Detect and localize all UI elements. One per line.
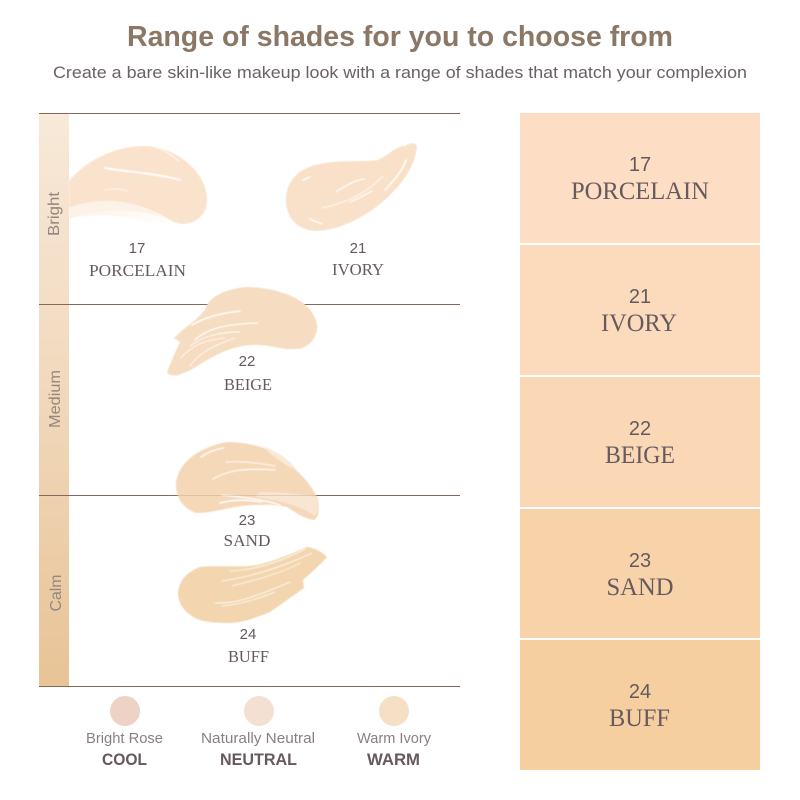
label: bright: Bright [46, 191, 63, 236]
shade smear: 17 porcelain [69, 146, 207, 224]
shade smear: 24 buff [178, 547, 327, 623]
legend: cool: Bright Rose [86, 730, 163, 747]
swatch: 17 porcelain [520, 113, 760, 243]
label: 17 porcelain: 17 [129, 240, 145, 257]
label: 21 ivory [332, 240, 384, 279]
label: medium: Medium [47, 370, 64, 428]
chart grid lines [39, 114, 460, 686]
swatch: 17 porcelain: 17 [629, 154, 651, 176]
legend: warm: Warm Ivory [357, 730, 431, 747]
shade smear: 22 beige [167, 287, 317, 376]
swatch: 24 buff [520, 640, 760, 770]
shade smear: 23 sand [176, 442, 319, 520]
label: 23 sand: SAND [224, 531, 270, 550]
legend: cool [86, 696, 163, 769]
shade smear: 21 ivory [286, 143, 417, 231]
brightness scale bar [39, 113, 69, 686]
legend: neutral [201, 696, 315, 769]
legend: cool: COOL [102, 750, 147, 769]
swatch: 23 sand: 23 [629, 550, 651, 572]
label: 23 sand: 23 [239, 512, 255, 529]
legend: neutral: Naturally Neutral [201, 730, 315, 747]
label: 22 beige [224, 353, 272, 394]
label: 22 beige: BEIGE [224, 375, 272, 394]
label: 24 buff: BUFF [228, 647, 269, 666]
label: 17 porcelain [89, 240, 186, 280]
label: 24 buff: 24 [240, 626, 256, 643]
legend: neutral: NEUTRAL [220, 750, 297, 769]
swatch: 22 beige: 22 [629, 418, 651, 440]
label: 21 ivory: IVORY [332, 260, 384, 279]
swatch: 22 beige: BEIGE [605, 442, 675, 469]
swatch: 21 ivory [520, 245, 760, 375]
label: 24 buff [228, 626, 269, 666]
label: 17 porcelain: PORCELAIN [89, 261, 186, 280]
legend: warm [357, 696, 431, 769]
label: 21 ivory: 21 [350, 240, 366, 257]
swatch: 22 beige [520, 377, 760, 507]
subtitle: Create a bare skin-like makeup look with a range of shades that match your complexion [53, 64, 747, 82]
swatch: 23 sand: SAND [606, 574, 674, 601]
label: 23 sand [224, 512, 270, 550]
swatch: 21 ivory: IVORY [601, 310, 677, 337]
swatch: 23 sand [520, 509, 760, 638]
swatch: 24 buff: BUFF [609, 705, 670, 732]
title: Range of shades for you to choose from [127, 21, 673, 53]
legend: warm: WARM [367, 750, 420, 769]
label: calm: Calm [48, 574, 65, 612]
label: 22 beige: 22 [239, 353, 255, 370]
swatch: 24 buff: 24 [629, 681, 651, 703]
swatch: 17 porcelain: PORCELAIN [571, 178, 709, 205]
swatch: 21 ivory: 21 [629, 286, 651, 308]
